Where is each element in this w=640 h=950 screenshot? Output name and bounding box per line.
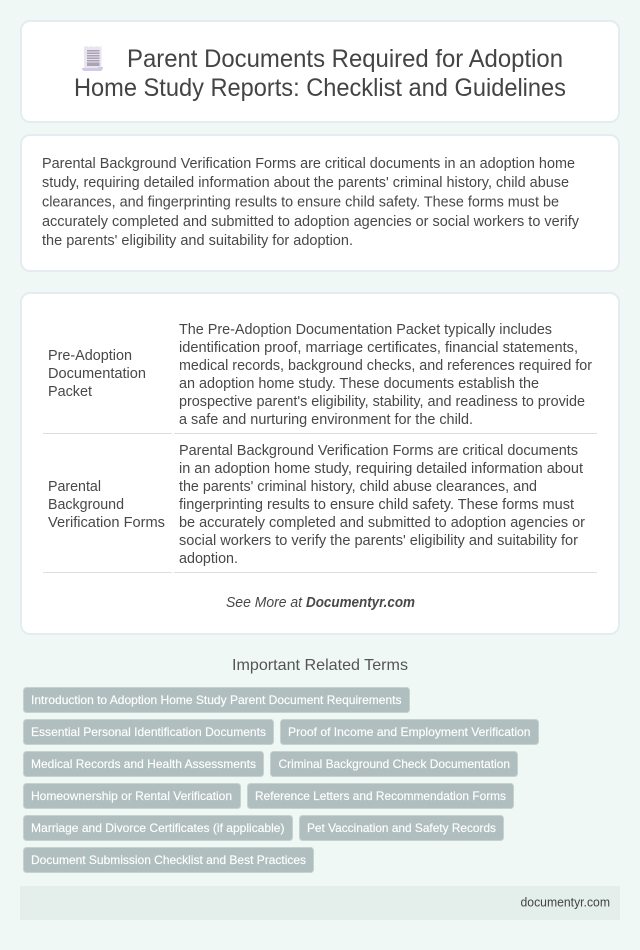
title: Home Study Reports: Checklist and Guidelines — [74, 74, 566, 102]
row description: the parents' criminal history, child abuse clearances, and — [179, 479, 537, 495]
row description: The Pre-Adoption Documentation Packet typically includes — [179, 322, 552, 338]
row description: a safe and nurturing environment for the child. — [179, 412, 473, 428]
text block: introduction paragraph: study, requiring detailed information about the parents' criminal history, child abuse — [42, 175, 569, 191]
row label — [48, 479, 165, 531]
row description: adoption. — [179, 551, 238, 567]
tag — [280, 720, 538, 744]
tag — [24, 688, 410, 712]
row label: Verification Forms — [48, 515, 165, 531]
tag: Pet Vaccination and Safety Records — [307, 821, 496, 835]
text block: introduction paragraph: clearances, and fingerprinting results to ensure child safety. These forms must be — [42, 194, 559, 210]
tag: Document Submission Checklist and Best Practices — [31, 853, 306, 867]
row description: an adoption home study. These documents establish the — [179, 376, 539, 392]
footer bar: documentyr.com — [520, 894, 610, 910]
tag: Marriage and Divorce Certificates (if applicable) — [31, 821, 284, 835]
title: Parent Documents Required for Adoption — [127, 45, 563, 73]
tag: Reference Letters and Recommendation Forms — [255, 789, 506, 803]
row description: Parental Background Verification Forms are critical documents — [179, 443, 578, 459]
panel: related term tags — [24, 688, 538, 872]
see more link — [226, 595, 415, 611]
panel: introduction — [21, 135, 619, 271]
row description: be accurately completed and submitted to adoption agencies or — [179, 515, 585, 531]
text block: introduction paragraph — [42, 156, 580, 249]
see more link: See More at — [226, 595, 303, 611]
row description: identification proof, marriage certificates, financial statements, — [179, 340, 578, 356]
tag: Criminal Background Check Documentation — [278, 757, 510, 771]
see more link: Documentyr.com — [306, 595, 415, 611]
row description: medical records, background checks, and references required for — [179, 358, 592, 374]
tag — [24, 752, 264, 776]
text block: introduction paragraph: Parental Background Verification Forms are critical documents in an adoption home — [42, 156, 575, 172]
row label: Background — [48, 497, 124, 513]
heading: important related terms: Important Related Terms — [232, 657, 408, 674]
row description — [179, 443, 585, 567]
text block: introduction paragraph: the parents' eligibility and suitability for adoption. — [42, 233, 353, 249]
row label — [48, 348, 146, 400]
row label: Pre-Adoption — [48, 348, 132, 364]
tag — [24, 816, 292, 840]
row description: prospective parent's eligibility, stability, and readiness to provide — [179, 394, 585, 410]
tag — [24, 720, 274, 744]
row description: in an adoption home study, requiring detailed information about — [179, 461, 583, 477]
table row: Parental Background Verification Forms — [48, 443, 585, 567]
row description — [179, 322, 592, 428]
tag: Introduction to Adoption Home Study Parent Document Requirements — [31, 693, 402, 707]
icon: document receipt — [82, 46, 103, 71]
tag — [248, 784, 514, 808]
tag — [24, 848, 314, 872]
row description: fingerprinting results to ensure child safety. These forms must — [179, 497, 574, 513]
row label: Documentation — [48, 366, 146, 382]
text block: introduction paragraph: accurately completed and submitted to adoption agencies or social workers to verify — [42, 214, 580, 230]
tag: Homeownership or Rental Verification — [31, 789, 232, 803]
table row: Pre-Adoption Documentation Packet — [48, 322, 592, 428]
tag: Essential Personal Identification Documents — [31, 725, 266, 739]
row label: Packet — [48, 384, 92, 400]
tag — [270, 752, 518, 776]
panel: title card — [21, 21, 619, 122]
title — [74, 45, 566, 102]
row description: social workers to verify the parents' eligibility and suitability for — [179, 533, 578, 549]
tag: Proof of Income and Employment Verification — [288, 725, 530, 739]
panel: document table — [21, 293, 619, 634]
tag: Medical Records and Health Assessments — [31, 757, 256, 771]
tag — [300, 816, 504, 840]
tag — [24, 784, 240, 808]
footer bar — [20, 886, 620, 920]
row label: Parental — [48, 479, 101, 495]
